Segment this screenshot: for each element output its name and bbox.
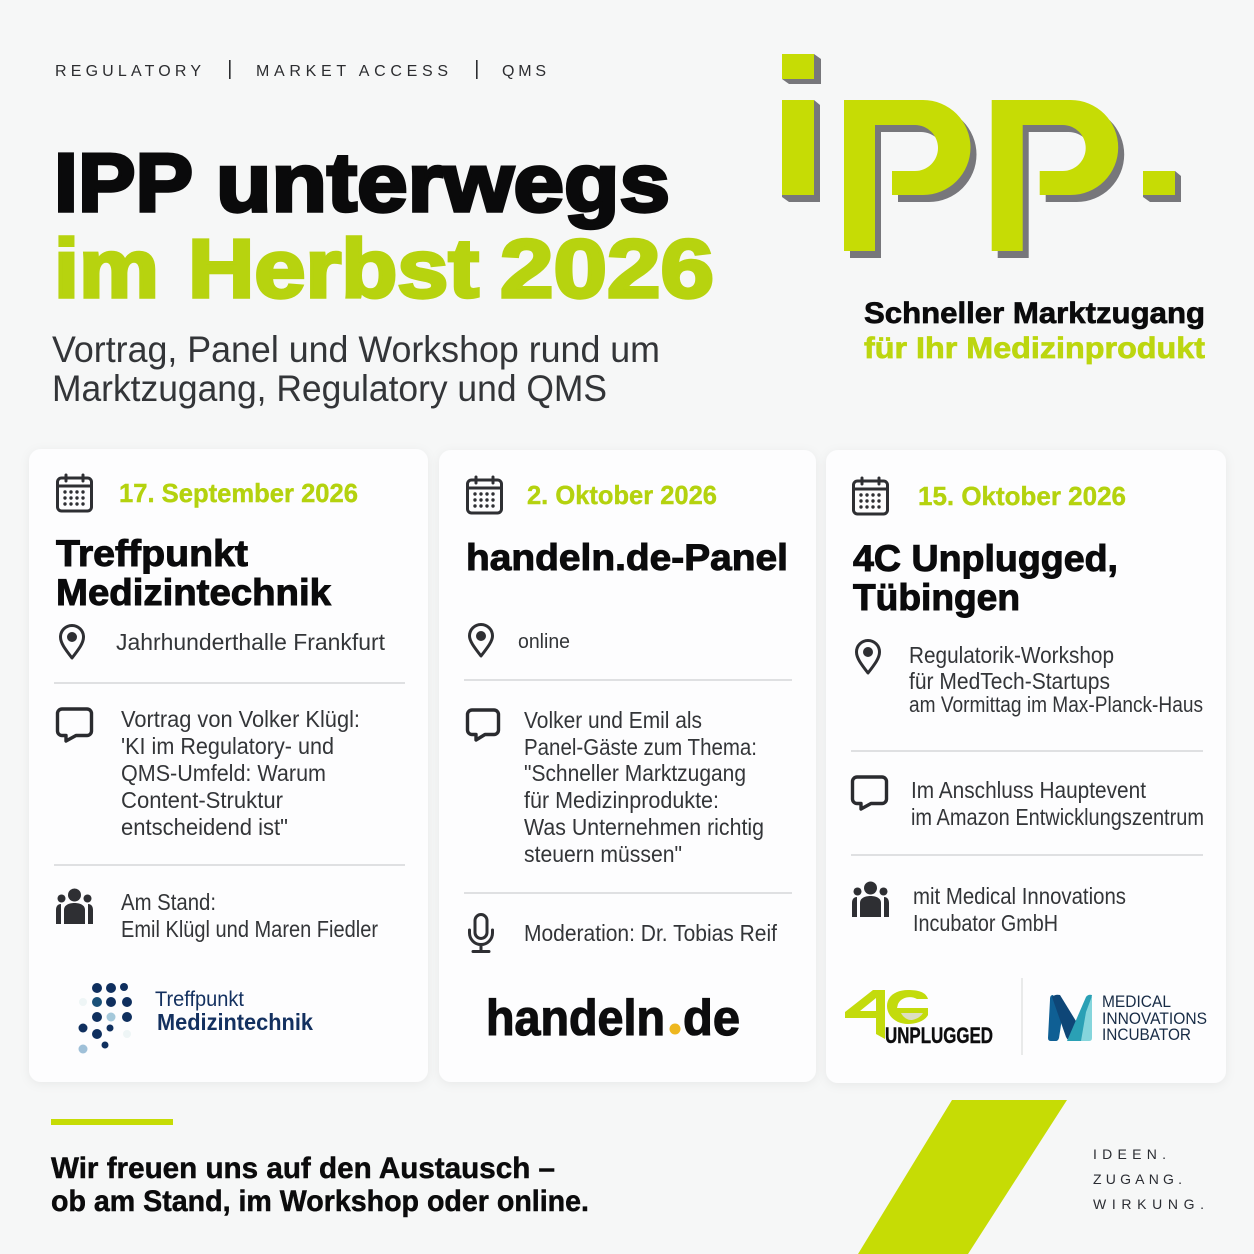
- panel: 4C Unplugged: [826, 450, 1226, 1083]
- logo: Treffpunkt Medizintechnik: Medizintechnik: [157, 1009, 313, 1035]
- partner: [913, 883, 1126, 936]
- event heading: 4C Unplugged,: [853, 538, 1118, 579]
- icon: calendar: [854, 478, 888, 514]
- motto: IDEEN.: [1093, 1146, 1166, 1162]
- talk description: QMS-Umfeld: Warum: [121, 760, 326, 786]
- top tagline: topics: QMS: [502, 63, 546, 80]
- logo: handeln.de: de: [683, 990, 740, 1046]
- event heading: Treffpunkt: [56, 533, 248, 574]
- main event: [911, 777, 1204, 830]
- logo claim: Schneller Marktzugang: [864, 297, 1205, 330]
- panel: Treffpunkt Medizintechnik: [29, 449, 428, 1082]
- workshop details: am Vormittag im Max-Planck-Haus: [909, 692, 1203, 717]
- logo: handeln.de: handeln: [486, 990, 665, 1046]
- panel description: "Schneller Marktzugang: [524, 760, 746, 786]
- location: Jahrhunderthalle Frankfurt: [116, 629, 386, 655]
- top tagline: topics: REGULATORY: [55, 63, 201, 80]
- icon: speech bubble: [58, 709, 92, 741]
- main event: Im Anschluss Hauptevent: [911, 777, 1147, 803]
- logo: Medical Innovations Incubator: INCUBATOR: [1102, 1025, 1191, 1044]
- panel description: Panel-Gäste zum Thema:: [524, 734, 757, 760]
- closing statement: [51, 1152, 589, 1218]
- logo: Medical Innovations Incubator: INNOVATIONS: [1102, 1009, 1207, 1028]
- motto: WIRKUNG.: [1093, 1196, 1204, 1212]
- closing statement: ob am Stand, im Workshop oder online.: [51, 1185, 589, 1218]
- title: unterwegs: [216, 136, 670, 229]
- workshop details: für MedTech-Startups: [909, 668, 1110, 694]
- logo: Medical Innovations Incubator: MEDICAL: [1102, 992, 1171, 1011]
- panel description: steuern müssen": [524, 841, 682, 867]
- logo: Medical Innovations Incubator: [1048, 992, 1207, 1044]
- event heading: [853, 538, 1118, 618]
- logo: Treffpunkt Medizintechnik: [78, 983, 313, 1054]
- logo: 4C Unplugged: UNPLUGGED: [885, 1023, 993, 1048]
- panel: handeln.de-Panel: [439, 450, 816, 1082]
- date: 15. Oktober 2026: [918, 481, 1126, 511]
- event heading: handeln.de-Panel: [466, 537, 788, 578]
- motto: ZUGANG.: [1093, 1171, 1182, 1187]
- title: [54, 136, 714, 315]
- icon: location pin: [856, 640, 880, 673]
- logo: Treffpunkt Medizintechnik: Treffpunkt: [155, 988, 244, 1011]
- talk description: [121, 706, 360, 840]
- closing statement: Wir freuen uns auf den Austausch –: [51, 1152, 555, 1185]
- icon: people: [56, 888, 93, 924]
- workshop details: Regulatorik-Workshop: [909, 642, 1114, 668]
- panel description: für Medizinprodukte:: [524, 787, 719, 813]
- date: 17. September 2026: [119, 478, 358, 508]
- location: online: [518, 631, 570, 653]
- title: IPP: [54, 136, 193, 229]
- panel description: Volker und Emil als: [524, 707, 702, 733]
- icon: location pin: [470, 624, 492, 656]
- subtitle: Vortrag, Panel und Workshop rund um: [52, 329, 660, 370]
- top tagline: topics: MARKET ACCESS: [256, 63, 448, 80]
- talk description: Content-Struktur: [121, 787, 283, 813]
- title: im: [54, 222, 159, 315]
- logo: 4C Unplugged: [845, 990, 993, 1048]
- icon: calendar: [468, 477, 502, 513]
- ipp logo: [782, 54, 1181, 258]
- panel description: Was Unternehmen richtig: [524, 814, 764, 840]
- event heading: Tübingen: [853, 577, 1020, 618]
- workshop details: [909, 642, 1203, 717]
- accent bar: [51, 1119, 173, 1125]
- logo claim: für Ihr Medizinprodukt: [864, 332, 1205, 365]
- partner: Incubator GmbH: [913, 910, 1058, 936]
- date: 2. Oktober 2026: [527, 480, 717, 510]
- icon: location pin: [60, 626, 84, 658]
- motto: [1093, 1146, 1204, 1212]
- main event: im Amazon Entwicklungszentrum: [911, 804, 1204, 830]
- event heading: [56, 533, 331, 613]
- icon: microphone: [470, 914, 492, 952]
- talk description: entscheidend ist": [121, 814, 288, 840]
- icon: speech bubble: [468, 710, 498, 740]
- icon: people: [852, 882, 889, 917]
- talk description: 'KI im Regulatory- und: [121, 733, 334, 759]
- lime parallelogram: [858, 1100, 1067, 1254]
- booth staff: [121, 889, 378, 942]
- booth staff: Am Stand:: [121, 889, 216, 915]
- subtitle: Marktzugang, Regulatory und QMS: [52, 368, 607, 409]
- subtitle: [52, 329, 660, 409]
- panel description: [524, 707, 764, 867]
- logo claim: [864, 297, 1205, 365]
- talk description: Vortrag von Volker Klügl:: [121, 706, 360, 732]
- icon: calendar: [58, 475, 92, 511]
- icon: speech bubble: [852, 777, 886, 809]
- moderator: Moderation: Dr. Tobias Reif: [524, 920, 778, 946]
- top tagline: topics: [55, 60, 546, 80]
- partner: mit Medical Innovations: [913, 883, 1126, 909]
- title: 2026: [500, 222, 714, 315]
- title: Herbst: [188, 222, 479, 315]
- event heading: Medizintechnik: [56, 572, 331, 613]
- booth staff: Emil Klügl und Maren Fiedler: [121, 916, 378, 942]
